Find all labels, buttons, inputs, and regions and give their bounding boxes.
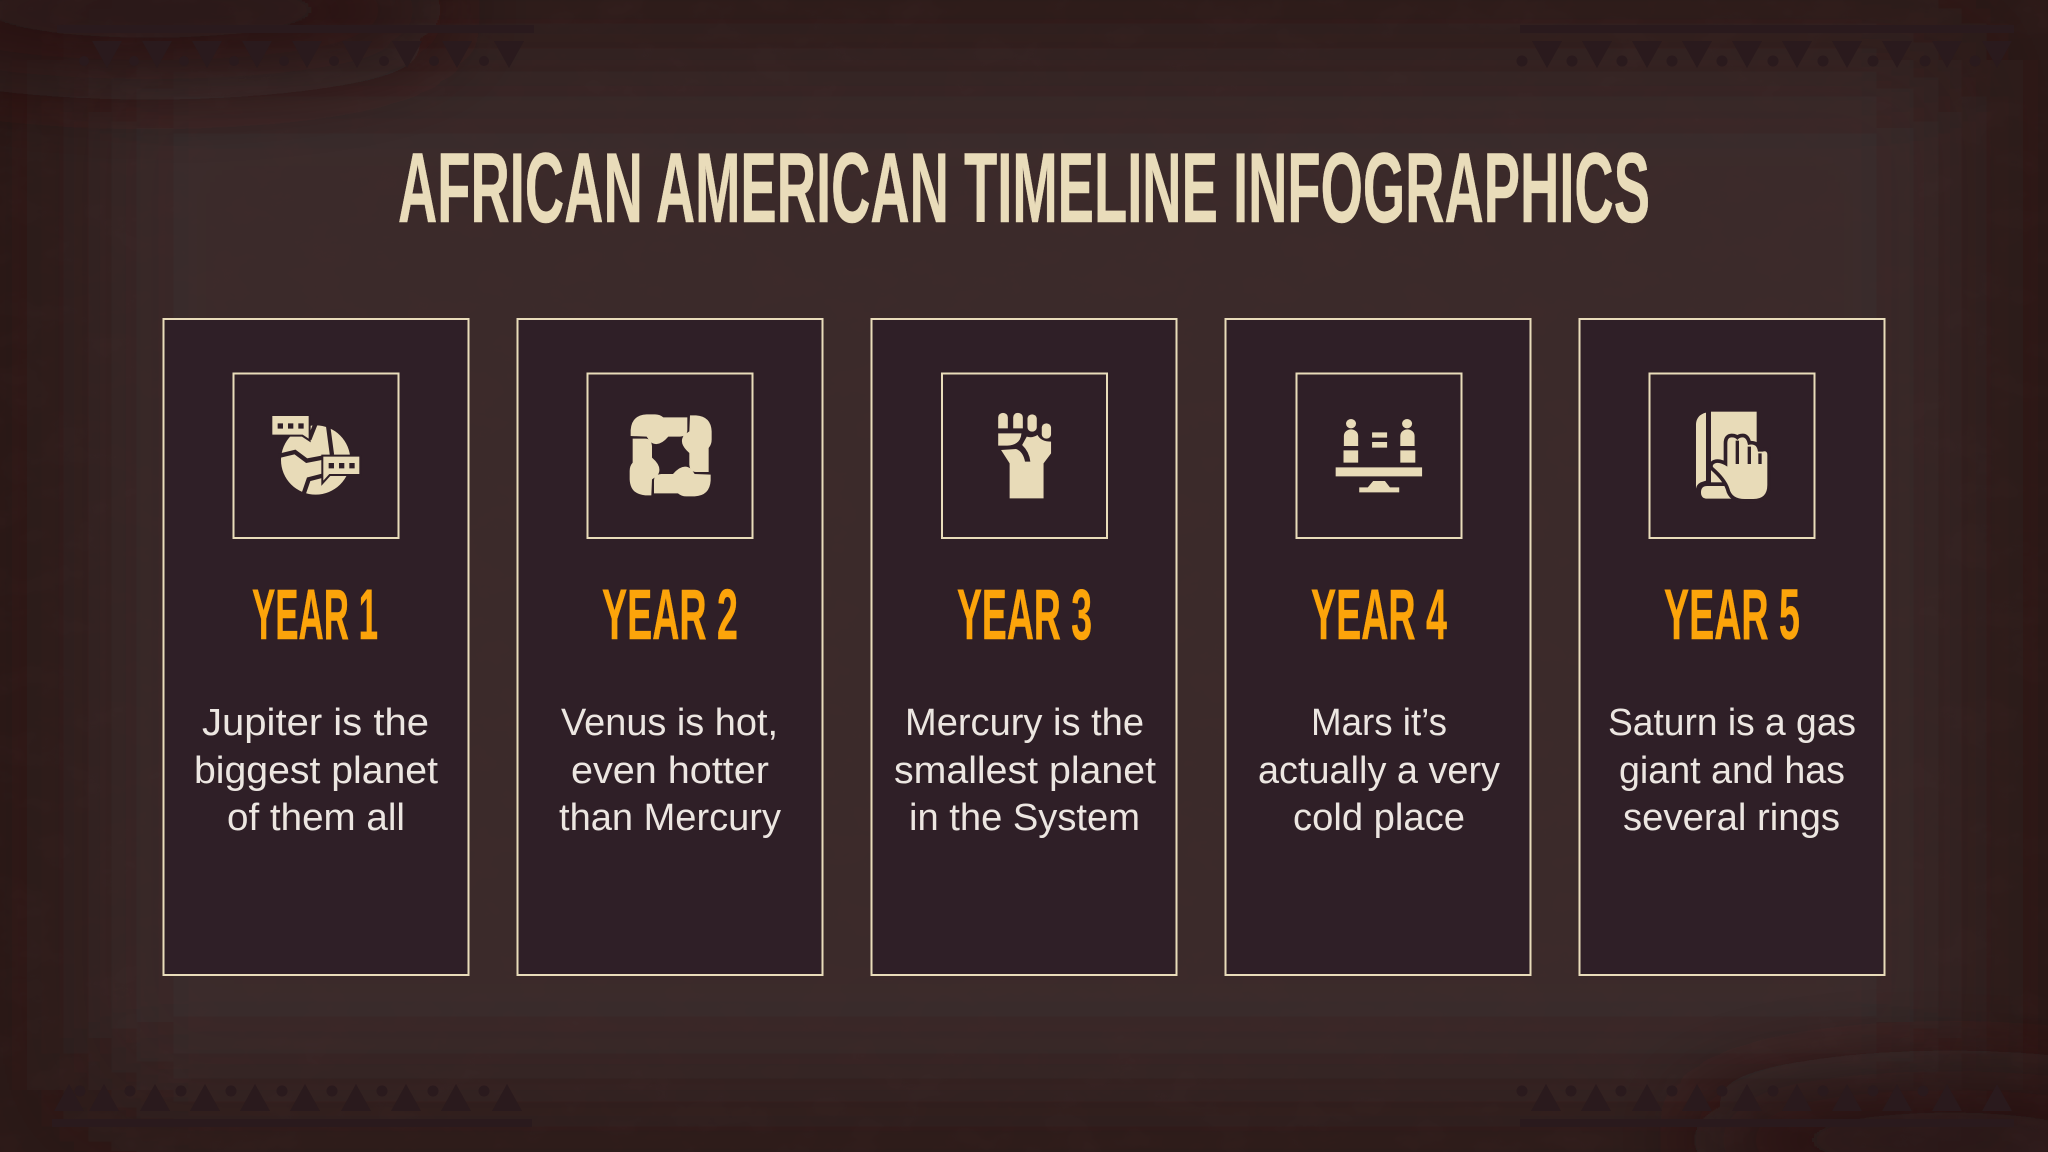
description — [1258, 702, 1500, 839]
icon frame — [234, 374, 398, 538]
panel: year 3 — [872, 319, 1176, 975]
icon: linked hands ring — [630, 414, 712, 496]
icon frame — [1296, 374, 1462, 538]
icon: equality balance — [1336, 419, 1422, 492]
description: cold place — [1293, 797, 1465, 839]
year label: YEAR 4 — [1311, 576, 1447, 655]
decorative pattern: bottom right — [1516, 1084, 2014, 1127]
description — [194, 702, 438, 839]
panel: year 1 — [164, 319, 468, 975]
description: Venus is hot, — [561, 702, 778, 744]
panel: year 4 — [1226, 319, 1530, 975]
year label: YEAR 2 — [602, 576, 738, 655]
card frame — [1580, 319, 1884, 975]
description: even hotter — [571, 750, 769, 792]
panel: year 1: YEAR 1 — [252, 576, 378, 655]
panel: year 5 — [1580, 319, 1884, 975]
description — [894, 702, 1156, 839]
description: Saturn is a gas — [1608, 702, 1856, 744]
description: Jupiter is the — [202, 702, 429, 744]
decorative pattern: top left — [57, 25, 534, 68]
icon: raised fist — [998, 413, 1051, 498]
description: giant and has — [1619, 750, 1845, 792]
card frame — [518, 319, 822, 975]
description: Mercury is the — [905, 702, 1144, 744]
description — [559, 702, 781, 839]
icon frame — [1650, 374, 1814, 538]
description: actually a very — [1258, 750, 1500, 792]
description: biggest planet — [194, 750, 438, 792]
panel: year 2 — [518, 319, 822, 975]
decorative pattern: bottom left — [52, 1084, 532, 1127]
description: several rings — [1623, 797, 1840, 839]
description: than Mercury — [559, 797, 781, 839]
card frame — [1226, 319, 1530, 975]
description: in the System — [909, 797, 1140, 839]
icon: globe with speech bubbles — [272, 416, 359, 497]
description: smallest planet — [894, 750, 1156, 792]
year label: YEAR 3 — [957, 576, 1092, 655]
decorative pattern: top right — [1516, 25, 2014, 68]
icon frame — [588, 374, 752, 538]
card frame — [164, 319, 468, 975]
description: of them all — [227, 797, 405, 839]
icon frame — [942, 374, 1107, 538]
description: Mars it’s — [1311, 702, 1447, 744]
icon: hand on book — [1696, 412, 1767, 499]
description — [1608, 702, 1856, 839]
year label: YEAR 5 — [1664, 576, 1800, 655]
card frame — [872, 319, 1176, 975]
